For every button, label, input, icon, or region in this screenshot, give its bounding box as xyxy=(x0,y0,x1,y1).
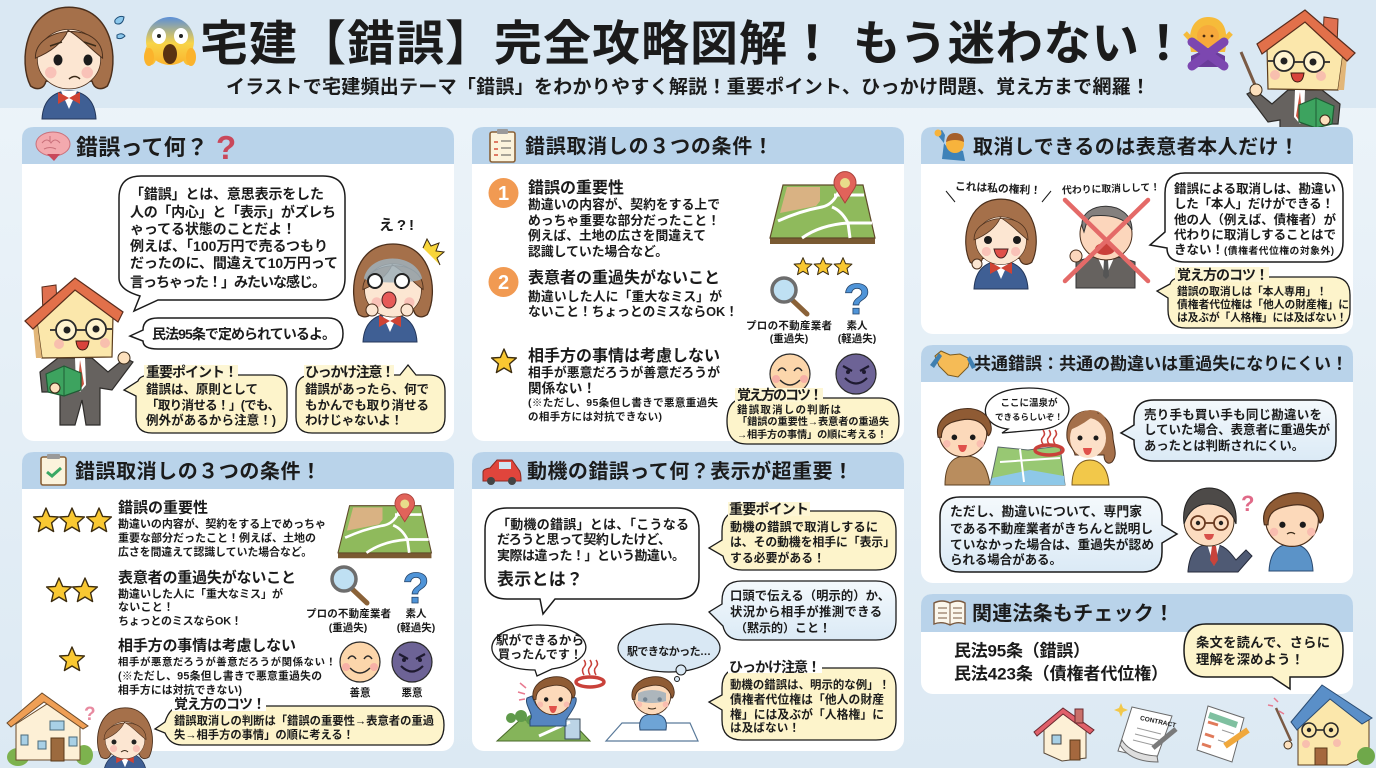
callout: memory tip: 錯誤の取消しは「本人専用」！ xyxy=(1177,284,1327,298)
panel: three conditions with stars xyxy=(7,452,454,768)
callout: memory tip xyxy=(155,696,444,745)
thought bubble: disappointed buyer xyxy=(618,624,720,682)
speech bubble: read the articles xyxy=(1184,624,1343,689)
character: creditor crossed out: 代わりに取消しして！ xyxy=(1062,180,1160,197)
panel: common mistake xyxy=(921,345,1353,583)
illustration: land map xyxy=(338,494,431,558)
legal articles list: 民法423条（債権者代位権） xyxy=(954,664,1168,684)
characters: realtor and buyer xyxy=(1184,488,1323,572)
condition 3 xyxy=(492,346,720,423)
condition: importance: 錯誤の重要性 xyxy=(118,498,208,516)
character: happy girl claiming right: これは私の権利！ xyxy=(955,179,1041,197)
speech bubble: both mistaken: 売り手も買い手も同じ勘違いを xyxy=(1144,407,1322,422)
speech bubble: definition xyxy=(119,176,345,311)
illustration: land map xyxy=(770,172,875,244)
subtitle: イラストで宅建頻出テーマ「錯誤」をわかりやすく解説！重要ポイント、ひっかけ問題、覚え方まで網羅！ xyxy=(226,75,1150,98)
speech bubble: only principal: した「本人」だけができる！ xyxy=(1174,196,1334,211)
illustration: contract and pen xyxy=(1114,703,1177,762)
condition: importance: 重要な部分だったこと！例えば、土地の xyxy=(118,530,316,544)
condition: importance: 勘違いの内容が、契約をする上でめっちゃ xyxy=(118,516,326,530)
icon: professional vs amateur: (重過失) xyxy=(770,332,808,345)
condition: other party circumstances xyxy=(60,636,336,696)
character: shocked girl: え?! xyxy=(379,217,414,234)
condition 2 xyxy=(488,267,738,319)
icon: good and bad faith faces: 悪意 xyxy=(402,686,423,699)
icon: professional vs amateur: プロの不動産業者 xyxy=(306,607,391,620)
panel heading xyxy=(472,127,904,164)
callout: trap warning xyxy=(296,364,445,433)
panel heading xyxy=(472,452,904,489)
condition: importance xyxy=(34,498,326,558)
condition: no gross negligence xyxy=(47,568,296,628)
speech bubble: read the articles: 条文を読んで、さらに xyxy=(1196,634,1330,650)
callout: trap warning: わけじゃないよ！ xyxy=(305,414,403,428)
speech bubble: expert exception xyxy=(940,497,1177,572)
callout: trap warning: は及ばない！ xyxy=(730,720,800,734)
callout: memory tip xyxy=(727,387,899,444)
speech bubble: definition xyxy=(485,508,699,614)
panel heading xyxy=(921,345,1353,382)
panel heading: 共通錯誤：共通の勘違いは重過失になりにくい！ xyxy=(974,354,1348,374)
icon: three stars xyxy=(794,258,852,275)
speech bubble: read the articles: 理解を深めよう！ xyxy=(1196,652,1304,667)
character: worried girl: ? xyxy=(84,704,96,725)
condition 3: の相手方には対抗できない) xyxy=(528,410,662,423)
speech bubble: article 95: 民法95条で定められているよ。 xyxy=(152,326,336,342)
speech bubble: article 95 xyxy=(130,318,343,349)
speech bubble: definition: 言っちゃった！」みたいな感じ。 xyxy=(130,274,326,290)
speech bubble: buyer: 買ったんです！ xyxy=(498,648,582,662)
callout: key point: は、その動機を相手に「表示」 xyxy=(730,535,895,549)
icon: professional vs amateur xyxy=(306,564,435,634)
legal articles list xyxy=(954,640,1168,684)
condition 1: 勘違いの内容が、契約をする上で xyxy=(528,197,720,212)
character: sad boy at desk xyxy=(606,677,698,741)
title xyxy=(200,18,1187,71)
condition 1: 例えば、土地の広さを間違えて xyxy=(528,228,706,243)
callout: memory tip: 「錯誤の重要性→表意者の重過失 xyxy=(737,415,890,428)
speech bubble: definition: 表示とは？ xyxy=(497,570,583,589)
condition 2: 表意者の重過失がないこと xyxy=(528,268,720,287)
callout: what is expression: 口頭で伝える（明示的）か、 xyxy=(730,588,890,603)
callout: key point: 例外があるから注意！) xyxy=(146,412,276,428)
callout: trap warning: もかんでも取り消せる xyxy=(305,398,429,412)
thought bubble: disappointed buyer: 駅できなかった… xyxy=(627,645,711,658)
panel heading: 錯誤って何？ xyxy=(76,135,208,160)
panel heading: 動機の錯誤って何？表示が超重要！ xyxy=(527,459,853,483)
character: happy boy on land xyxy=(497,660,604,741)
icon: professional vs amateur: 素人 xyxy=(406,607,427,620)
callout: memory tip: 失→相手方の事情」の順に考える！ xyxy=(174,728,354,742)
icon: professional vs amateur: ? xyxy=(403,564,429,613)
callout: key point: 動機の錯誤で取消しするに xyxy=(730,519,878,534)
callout: memory tip: 錯誤取消しの判断は xyxy=(737,403,842,416)
icon: professional vs amateur: (軽過失) xyxy=(838,332,876,345)
speech bubble: buyer xyxy=(492,625,586,676)
icon: professional vs amateur: (軽過失) xyxy=(397,621,435,634)
speech bubble: only principal: 他の人（例えば、債権者）が xyxy=(1174,212,1336,227)
panel: what is mistake xyxy=(22,127,454,441)
panel: only the declarant can cancel xyxy=(921,127,1353,334)
speech bubble: buyer: 駅ができるから xyxy=(496,632,584,648)
callout: trap warning: 権」には及ぶが「人格権」に xyxy=(730,708,884,722)
condition 1: 1 xyxy=(498,183,509,205)
callout: key point: 「取り消せる！」(でも、 xyxy=(146,398,280,412)
speech bubble: expert exception: られる場合がある。 xyxy=(950,552,1062,567)
condition 1 xyxy=(488,178,720,259)
callout: key point: 重要ポイント xyxy=(729,501,809,517)
panel heading: 錯誤取消しの３つの条件！ xyxy=(75,460,321,483)
callout: what is expression xyxy=(709,581,896,640)
callout: memory tip: 覚え方のコツ！ xyxy=(1177,267,1269,283)
speech bubble: definition: 「錯誤」とは、意思表示をした xyxy=(130,186,324,202)
icon: professional vs amateur xyxy=(746,275,876,345)
condition: other party circumstances: 相手方の事情は考慮しない xyxy=(118,636,296,654)
speech bubble: only principal: (債権者代位権の対象外) xyxy=(1224,244,1334,257)
speech bubble: only principal: 錯誤による取消しは、勘違い xyxy=(1174,181,1336,196)
character: worried girl xyxy=(84,704,152,768)
panel: mistake in motive xyxy=(472,452,904,751)
condition: no gross negligence: ないこと！ xyxy=(118,600,174,614)
condition 2: 2 xyxy=(498,272,509,294)
panel heading: 錯誤取消しの３つの条件！ xyxy=(525,135,773,158)
speech bubble: hot spring: できるらしいぞ！ xyxy=(995,412,1063,422)
callout: trap warning xyxy=(709,659,896,740)
condition: no gross negligence: 勘違いした人に「重大なミス」が xyxy=(118,586,283,600)
icon: no-good gesture emoji xyxy=(1185,17,1231,67)
speech bubble: definition: 人の「内心」と「表示」がズレち xyxy=(130,204,336,220)
speech bubble: expert exception: ていなかった場合は、重過失が認め xyxy=(950,537,1154,552)
speech bubble: hot spring xyxy=(985,388,1069,433)
icon: good and bad faith faces xyxy=(770,354,876,394)
condition 1: 錯誤の重要性 xyxy=(528,178,624,197)
speech bubble: both mistaken: していた場合、表意者に重過失が xyxy=(1144,422,1331,437)
illustration: couple with map xyxy=(937,409,1115,485)
condition 2: ないこと！ちょっとのミスならOK！ xyxy=(528,304,738,319)
condition 1: 認識していた場合など。 xyxy=(528,244,668,259)
panel heading: 関連法条もチェック！ xyxy=(972,601,1174,625)
icon: good and bad faith faces: 善意 xyxy=(350,686,371,699)
legal articles list: 民法95条（錯誤） xyxy=(954,640,1090,660)
callout: memory tip: →相手方の事情」の順に考える！ xyxy=(737,428,887,441)
icon: professional vs amateur: ? xyxy=(844,275,870,324)
callout: key point: 錯誤は、原則として xyxy=(146,382,258,396)
condition 3: (※ただし、95条但し書きで悪意重過失 xyxy=(528,396,718,409)
speech bubble: only principal xyxy=(1150,173,1343,262)
panel heading: 取消しできるのは表意者本人だけ！ xyxy=(973,136,1299,158)
character: house teacher xyxy=(25,278,133,425)
callout: memory tip: 覚え方のコツ！ xyxy=(174,696,266,712)
icon: good and bad faith faces xyxy=(340,642,432,699)
icon: professional vs amateur: プロの不動産業者 xyxy=(746,319,832,332)
condition 3: 相手が悪意だろうが善意だろうが xyxy=(528,365,720,380)
speech bubble: hot spring: ここに温泉が xyxy=(1000,397,1058,409)
condition: importance: 広さを間違えて認識していた場合など。 xyxy=(118,544,312,558)
condition: other party circumstances: (※ただし、95条但し書きで悪意重過失の xyxy=(118,668,322,682)
panel heading xyxy=(921,594,1353,632)
callout: memory tip: 覚え方のコツ！ xyxy=(737,387,823,403)
illustration: contract and pen: CONTRACT xyxy=(1139,715,1177,729)
illustration: red roof house xyxy=(1034,708,1094,761)
character: house teacher with pointer xyxy=(1241,10,1355,157)
condition: no gross negligence: 表意者の重過失がないこと xyxy=(118,568,296,586)
speech bubble: only principal: 代わりに取消しすることはで xyxy=(1174,227,1336,242)
title: 宅建【錯誤】完全攻略図解！ xyxy=(200,18,836,71)
title: もう迷わない！ xyxy=(853,18,1187,71)
callout: what is expression: 状況から相手が推測できる xyxy=(730,604,882,619)
condition 3: 関係ない！ xyxy=(528,381,596,396)
speech bubble: definition: 例えば、「100万円で売るつもり xyxy=(130,238,328,254)
panel heading xyxy=(921,127,1353,164)
callout: memory tip xyxy=(1157,267,1350,328)
panel: related articles xyxy=(921,594,1353,694)
callout: key point xyxy=(124,364,287,433)
character: blue roof house teacher xyxy=(1268,685,1375,765)
character: worried girl xyxy=(25,7,125,119)
callout: what is expression: （黙示的）こと！ xyxy=(735,620,831,635)
speech bubble: both mistaken: あったとは判断されにくい。 xyxy=(1144,438,1304,453)
speech bubble: definition: ゃってる状態のことだよ！ xyxy=(130,221,296,237)
characters: realtor and buyer: ? xyxy=(1241,491,1254,516)
speech bubble: definition: だったのに、間違えて10万円って xyxy=(130,255,338,271)
callout: trap warning: ひっかけ注意！ xyxy=(305,364,395,380)
speech bubble: expert exception: ただし、勘違いについて、専門家 xyxy=(950,504,1142,519)
icon: red cross xyxy=(1065,200,1148,281)
panel heading xyxy=(22,127,454,166)
header band xyxy=(0,0,1376,108)
speech bubble: only principal: きない！ xyxy=(1174,243,1224,257)
callout: trap warning: ひっかけ注意！ xyxy=(729,659,821,675)
condition: no gross negligence: ちょっとのミスならOK！ xyxy=(118,614,242,628)
icon: professional vs amateur: 素人 xyxy=(846,319,868,332)
speech bubble: definition: だろうと思って契約したけど、 xyxy=(497,532,671,547)
callout: trap warning: 動機の錯誤は、明示的な例」！ xyxy=(730,678,890,692)
character: shocked girl xyxy=(354,217,444,342)
illustration: documents and pencil xyxy=(1197,706,1248,762)
callout: key point xyxy=(709,501,896,570)
callout: memory tip: は及ぶが「人格権」には及ばない！ xyxy=(1177,310,1347,324)
condition: other party circumstances: 相手が悪意だろうが善意だろうが関係ない！ xyxy=(118,656,336,668)
condition: other party circumstances: 相手方には対抗できない) xyxy=(118,682,242,696)
illustration: house xyxy=(7,693,93,766)
callout: memory tip: 錯誤取消しの判断は「錯誤の重要性→表意者の重過 xyxy=(174,714,434,728)
speech bubble: definition: 実際は違った！」という勘違い。 xyxy=(497,548,685,563)
speech bubble: definition: 「動機の錯誤」とは、「こうなる xyxy=(497,517,689,532)
icon: professional vs amateur: (重過失) xyxy=(329,621,367,634)
panel heading xyxy=(22,452,454,489)
icon: screaming face emoji xyxy=(144,17,196,66)
panel: three conditions with numbers xyxy=(472,127,904,444)
panel heading: ? xyxy=(216,129,236,166)
callout: key point: 重要ポイント！ xyxy=(146,364,238,380)
character: happy girl claiming right xyxy=(946,179,1051,289)
callout: trap warning: 債権者代位権は「他人の財産 xyxy=(730,692,884,706)
condition 1: めっちゃ重要な部分だったこと！ xyxy=(528,213,720,228)
condition 2: 勘違いした人に「重大なミス」が xyxy=(528,289,722,304)
callout: key point: する必要がある！ xyxy=(730,551,825,565)
character: creditor crossed out xyxy=(1062,180,1160,288)
callout: trap warning: 錯誤があったら、何で xyxy=(305,382,429,396)
callout: memory tip: 債権者代位権は「他人の財産権」に xyxy=(1177,297,1349,311)
condition 3: 相手方の事情は考慮しない xyxy=(528,346,720,365)
speech bubble: both mistaken xyxy=(1121,400,1336,461)
speech bubble: expert exception: である不動産業者がきちんと説明し xyxy=(950,521,1153,536)
